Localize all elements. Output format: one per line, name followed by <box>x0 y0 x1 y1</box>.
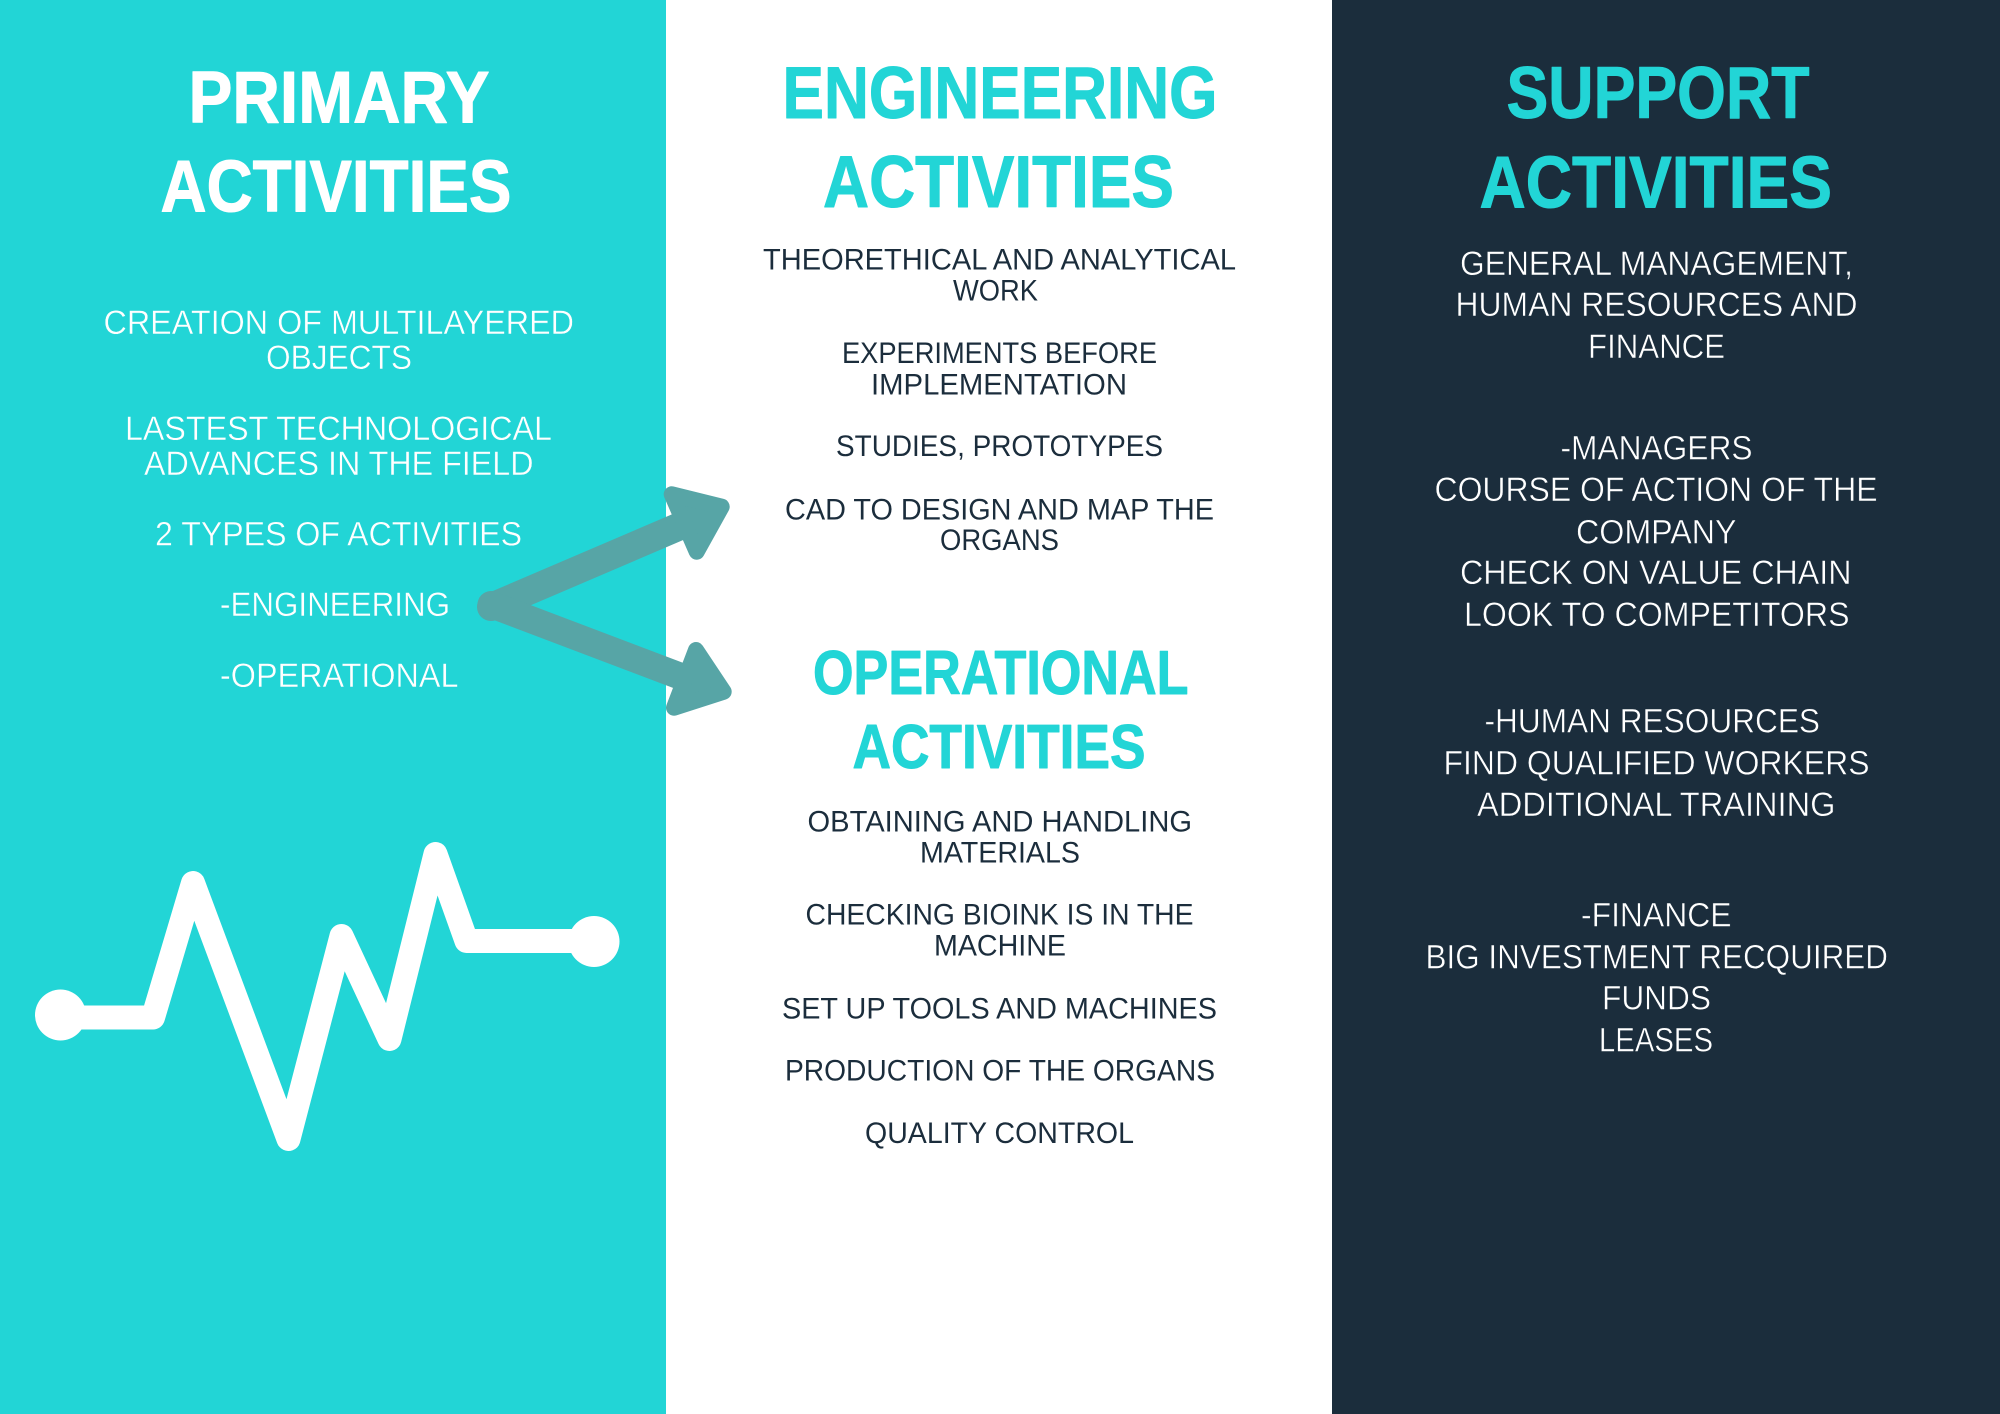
text: managers: LOOK TO COMPETITORS <box>1464 596 1850 634</box>
text: CAD design <box>785 494 1214 557</box>
text: human resources <box>1444 702 1870 824</box>
text: checking bioink: MACHINE <box>934 930 1066 962</box>
text: multilayered objects <box>104 304 574 377</box>
text: operational: -OPERATIONAL <box>220 657 458 695</box>
text: general management: FINANCE <box>1588 328 1725 366</box>
heading: primary activities: ACTIVITIES <box>160 146 512 228</box>
text: general management: HUMAN RESOURCES AND <box>1456 286 1858 324</box>
text: CAD design: ORGANS <box>940 524 1059 557</box>
text: obtaining materials <box>808 806 1192 870</box>
text: managers: COURSE OF ACTION OF THE <box>1434 471 1878 509</box>
text: multilayered objects: OBJECTS <box>266 339 412 377</box>
text: checking bioink: CHECKING BIOINK IS IN THE <box>806 898 1194 932</box>
icon: heartbeat line <box>35 854 620 1139</box>
text: human resources: -HUMAN RESOURCES <box>1484 702 1820 740</box>
heading: operational activities: ACTIVITIES <box>852 713 1146 782</box>
text: CAD design: CAD TO DESIGN AND MAP THE <box>785 494 1214 526</box>
heading: support activities: ACTIVITIES <box>1480 142 1832 224</box>
text: finance: -FINANCE <box>1581 896 1732 934</box>
heading: engineering activities <box>782 53 1218 223</box>
text: obtaining materials: OBTAINING AND HANDLING <box>808 806 1192 838</box>
text: finance <box>1426 896 1888 1060</box>
text: studies and prototypes: STUDIES, PROTOTYPES <box>836 430 1163 463</box>
text: finance: FUNDS <box>1602 980 1711 1018</box>
panel: primary activities <box>0 0 666 1414</box>
text: technological advances: ADVANCES IN THE FIELD <box>144 445 534 483</box>
text: general management <box>1456 245 1858 366</box>
heading: support activities: SUPPORT <box>1506 53 1810 134</box>
text: technological advances <box>125 410 552 483</box>
primary panel background <box>0 0 666 1414</box>
text: managers: -MANAGERS <box>1560 430 1752 468</box>
text: checking bioink <box>806 898 1194 962</box>
text: obtaining materials: MATERIALS <box>920 836 1080 870</box>
heading: support activities <box>1480 53 1832 224</box>
text: theoretical and analytical work <box>763 244 1236 308</box>
text: theoretical and analytical work: WORK <box>953 274 1038 308</box>
text: experiments before implementation <box>842 337 1157 402</box>
heading: engineering activities: ENGINEERING <box>782 53 1218 134</box>
arrow: to engineering activities <box>491 494 722 607</box>
panel: support activities <box>1332 0 2000 1414</box>
text: human resources: FIND QUALIFIED WORKERS <box>1444 744 1870 782</box>
heading: primary activities <box>160 58 512 228</box>
text: finance: BIG INVESTMENT RECQUIRED <box>1426 938 1888 976</box>
heading: operational activities <box>813 639 1188 782</box>
text: experiments before implementation: EXPERIMENTS BEFORE <box>842 337 1157 370</box>
text: engineering: -ENGINEERING <box>220 586 450 624</box>
text: set up tools: SET UP TOOLS AND MACHINES <box>782 992 1217 1026</box>
text: technological advances: LASTEST TECHNOLOGICAL <box>125 410 552 448</box>
arrow: to operational activities <box>491 604 724 708</box>
text: theoretical and analytical work: THEORETHICAL AND ANALYTICAL <box>763 244 1236 276</box>
heading: primary activities: PRIMARY <box>188 58 490 138</box>
text: finance: LEASES <box>1599 1022 1713 1060</box>
heading: operational activities: OPERATIONAL <box>813 639 1188 708</box>
text: managers: COMPANY <box>1576 514 1736 552</box>
heading: engineering activities: ACTIVITIES <box>823 142 1174 223</box>
text: two types of activities: 2 TYPES OF ACTIVITIES <box>155 516 522 554</box>
text: managers <box>1434 430 1878 634</box>
panel: engineering and operational activities <box>666 0 1332 1414</box>
middle panel background <box>666 0 1332 1414</box>
text: human resources: ADDITIONAL TRAINING <box>1477 786 1836 824</box>
text: multilayered objects: CREATION OF MULTILAYERED <box>104 304 574 342</box>
text: production of organs: PRODUCTION OF THE ORGANS <box>785 1054 1215 1088</box>
arrows: from primary activities to engineering and operational <box>491 494 724 708</box>
support panel background <box>1332 0 2000 1414</box>
text: quality control: QUALITY CONTROL <box>865 1117 1134 1150</box>
text: experiments before implementation: IMPLEMENTATION <box>871 368 1127 402</box>
text: general management: GENERAL MANAGEMENT, <box>1460 245 1853 283</box>
text: managers: CHECK ON VALUE CHAIN <box>1460 554 1852 592</box>
